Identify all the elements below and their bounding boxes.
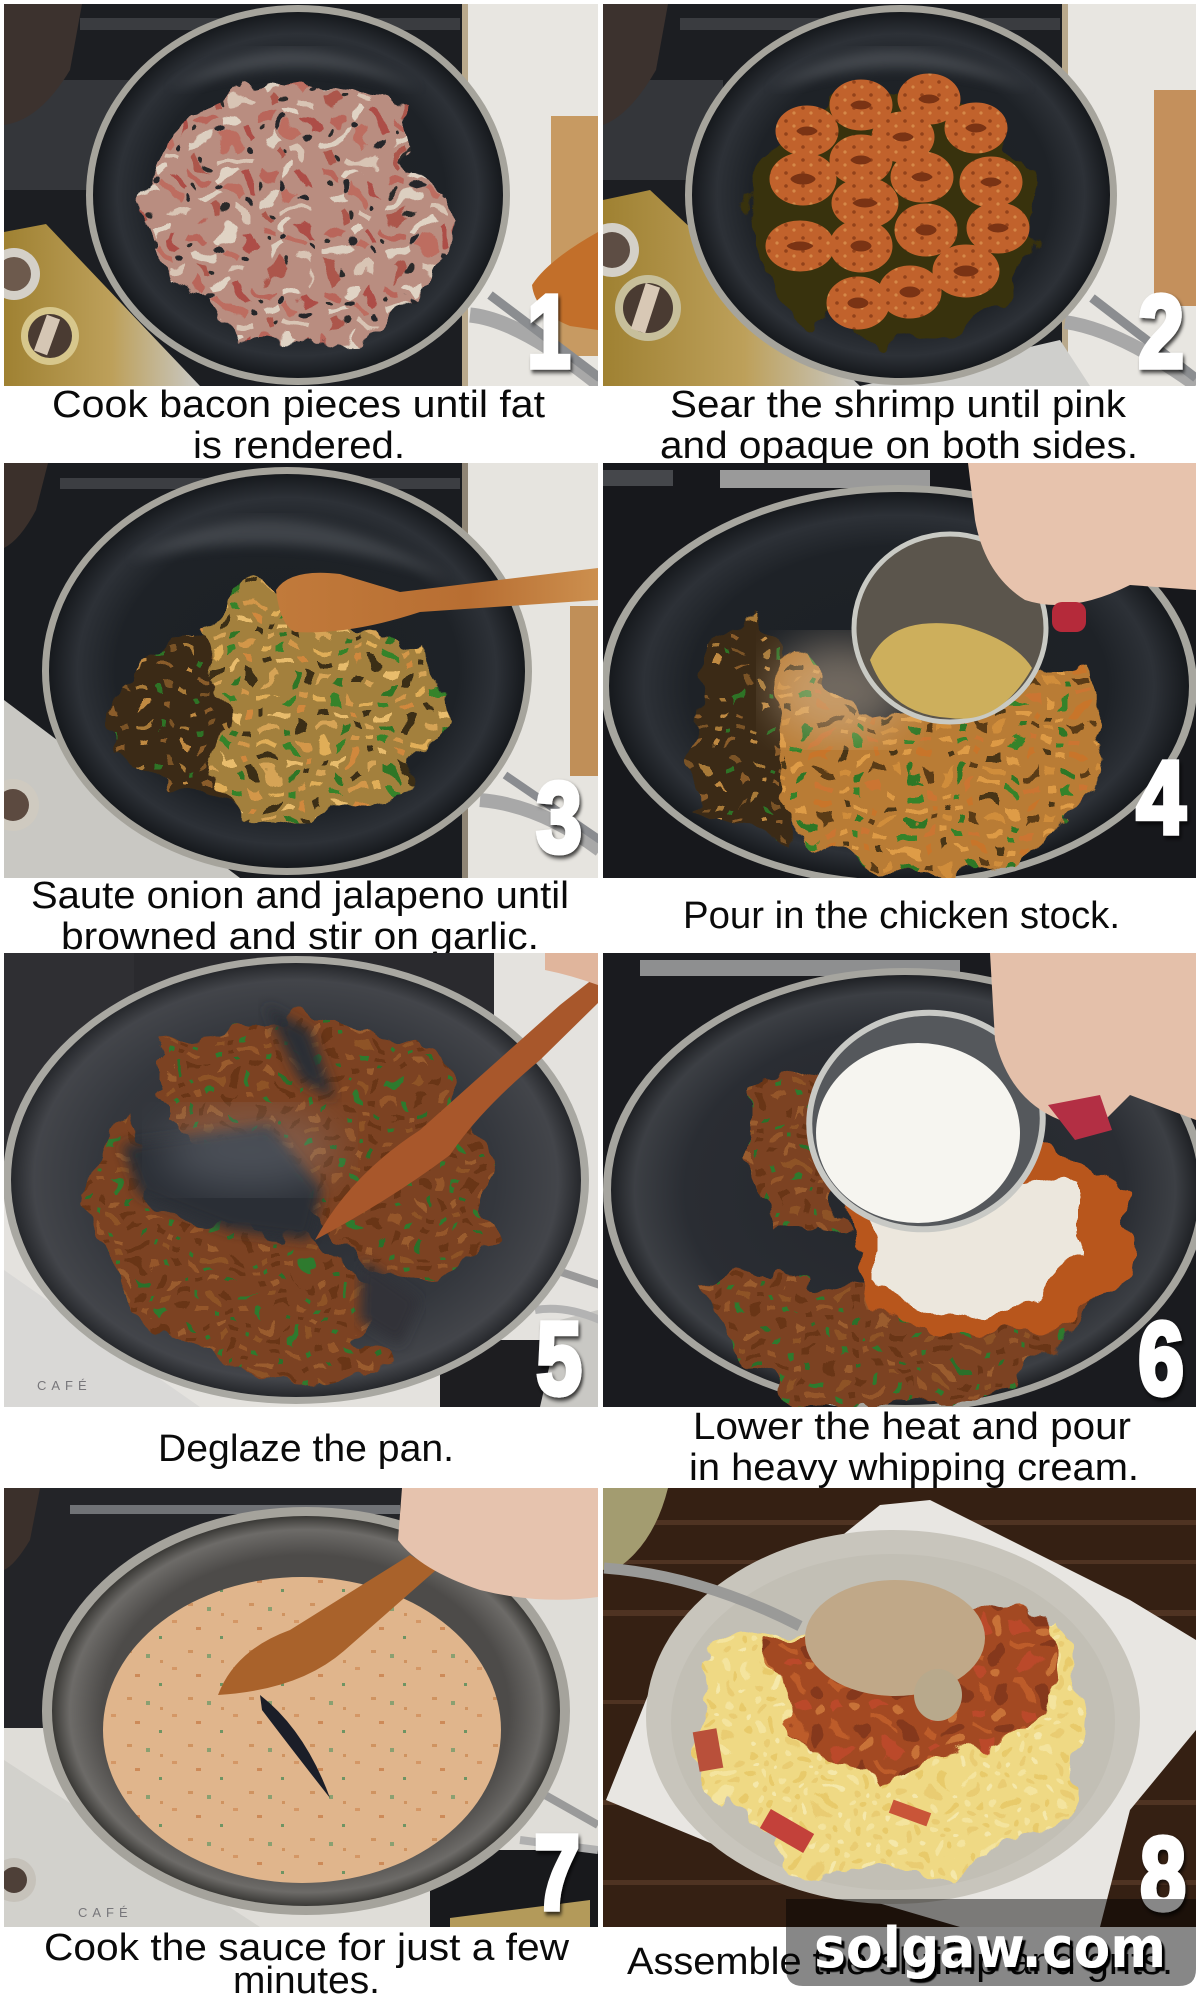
spoon handle bbox=[604, 1568, 800, 1626]
scraped line bbox=[260, 1695, 330, 1798]
caption 8: Assemble the shrimp and grits. bbox=[627, 1941, 1173, 1983]
steam bbox=[770, 640, 910, 740]
caption 2: Sear the shrimp until pink bbox=[670, 384, 1127, 426]
step number 5: 5 bbox=[536, 1301, 582, 1416]
panel: step 8 assemble bbox=[603, 1488, 1196, 1983]
pan highlight bbox=[144, 516, 432, 574]
hand bbox=[398, 1488, 598, 1600]
bacon pieces bbox=[145, 80, 456, 345]
steam bbox=[160, 1110, 340, 1190]
step number 4: 4 bbox=[1137, 741, 1185, 856]
wooden spoon bbox=[315, 975, 598, 1240]
caption 7: Cook the sauce for just a few bbox=[44, 1927, 570, 1969]
bowl bbox=[646, 1530, 1140, 1904]
cafe logo: CAFÉ bbox=[78, 1905, 133, 1920]
sparse browned left region bbox=[690, 610, 810, 850]
shrimp bbox=[776, 84, 1019, 319]
poured cream bbox=[875, 1170, 1085, 1315]
step number 7: 7 bbox=[534, 1814, 580, 1932]
caption 3: Saute onion and jalapeno until bbox=[31, 875, 569, 917]
caption 3 bbox=[31, 875, 569, 958]
photo: pouring stock into pan bbox=[601, 463, 1197, 887]
caption 2 bbox=[660, 384, 1138, 467]
napkin bbox=[606, 1500, 1196, 1927]
photo: pouring cream into pan bbox=[603, 953, 1200, 1412]
panel: step 5 deglaze bbox=[3, 953, 600, 1470]
photo: creamy sauce in pan bbox=[0, 1488, 598, 1927]
step number 6: 6 bbox=[1138, 1301, 1184, 1416]
panel: step 2 sear shrimp bbox=[585, 4, 1196, 467]
photo: vegetables in pan with wooden spoon bbox=[0, 463, 600, 878]
glass bowl with stock bbox=[854, 534, 1046, 722]
step number 8: 8 bbox=[1140, 1816, 1186, 1931]
dark centre bbox=[122, 1125, 322, 1240]
pan highlight bbox=[184, 46, 402, 86]
browned sauce bottom bbox=[695, 1272, 1120, 1405]
glass bowl with cream bbox=[806, 1010, 1046, 1232]
hand bbox=[545, 953, 598, 985]
step number 2: 2 bbox=[1138, 274, 1184, 389]
browned sauce left bbox=[745, 1070, 850, 1230]
hand bbox=[990, 953, 1196, 1125]
photo: shrimp in pan bbox=[585, 4, 1196, 386]
caption 1: is rendered. bbox=[193, 425, 405, 467]
photo: deglazing pan bbox=[3, 953, 600, 1407]
grits bbox=[700, 1620, 1083, 1875]
onion and jalapeno mixture bbox=[200, 580, 450, 830]
spoon of sauce bbox=[805, 1580, 985, 1696]
step number 1: 1 bbox=[527, 275, 571, 390]
red nail bbox=[1052, 602, 1086, 632]
oil under shrimp bbox=[750, 90, 1040, 340]
panel: step 7 cook sauce bbox=[0, 1488, 598, 2000]
wooden spoon bbox=[276, 568, 598, 632]
caption 7 bbox=[44, 1927, 570, 2000]
photo: finished bowl of shrimp and grits bbox=[603, 1488, 1196, 1927]
pan highlight bbox=[784, 46, 1010, 86]
watermark bbox=[786, 1899, 1196, 1986]
caption 1: Cook bacon pieces until fat bbox=[52, 384, 545, 426]
orange ring bbox=[850, 1130, 1130, 1335]
photo: bacon in pan on stove bbox=[0, 4, 600, 386]
wooden spoon bbox=[218, 1555, 436, 1695]
caption 6 bbox=[689, 1406, 1139, 1489]
red nails bbox=[1048, 1095, 1112, 1140]
watermark: solgaw.com bbox=[814, 1916, 1166, 1981]
caption 2: and opaque on both sides. bbox=[660, 425, 1138, 467]
panel: step 1 cook bacon bbox=[0, 4, 600, 467]
panel: step 3 saute onion and jalapeno bbox=[0, 463, 600, 958]
browned sauce lower bbox=[80, 1120, 400, 1385]
stock mixture bbox=[775, 650, 1100, 872]
pan corner bbox=[603, 1488, 668, 1570]
caption 5: Deglaze the pan. bbox=[158, 1428, 454, 1470]
cream sauce bbox=[103, 1577, 501, 1883]
caption 6: in heavy whipping cream. bbox=[689, 1447, 1139, 1489]
panel: step 6 pour cream bbox=[603, 953, 1200, 1489]
caption 4: Pour in the chicken stock. bbox=[683, 895, 1120, 937]
sauce drip bbox=[914, 1669, 962, 1721]
caption 6: Lower the heat and pour bbox=[693, 1406, 1131, 1448]
cafe logo: CAFÉ bbox=[37, 1378, 92, 1393]
step number 3: 3 bbox=[536, 762, 582, 874]
browned sauce top bbox=[160, 1020, 495, 1285]
shrimp and bacon topping bbox=[765, 1610, 1055, 1780]
panel: step 4 pour stock bbox=[601, 463, 1197, 937]
caption 1 bbox=[52, 384, 545, 467]
caption 3: browned and stir on garlic. bbox=[61, 916, 539, 958]
browned left region bbox=[105, 635, 238, 807]
hand bbox=[968, 463, 1196, 605]
